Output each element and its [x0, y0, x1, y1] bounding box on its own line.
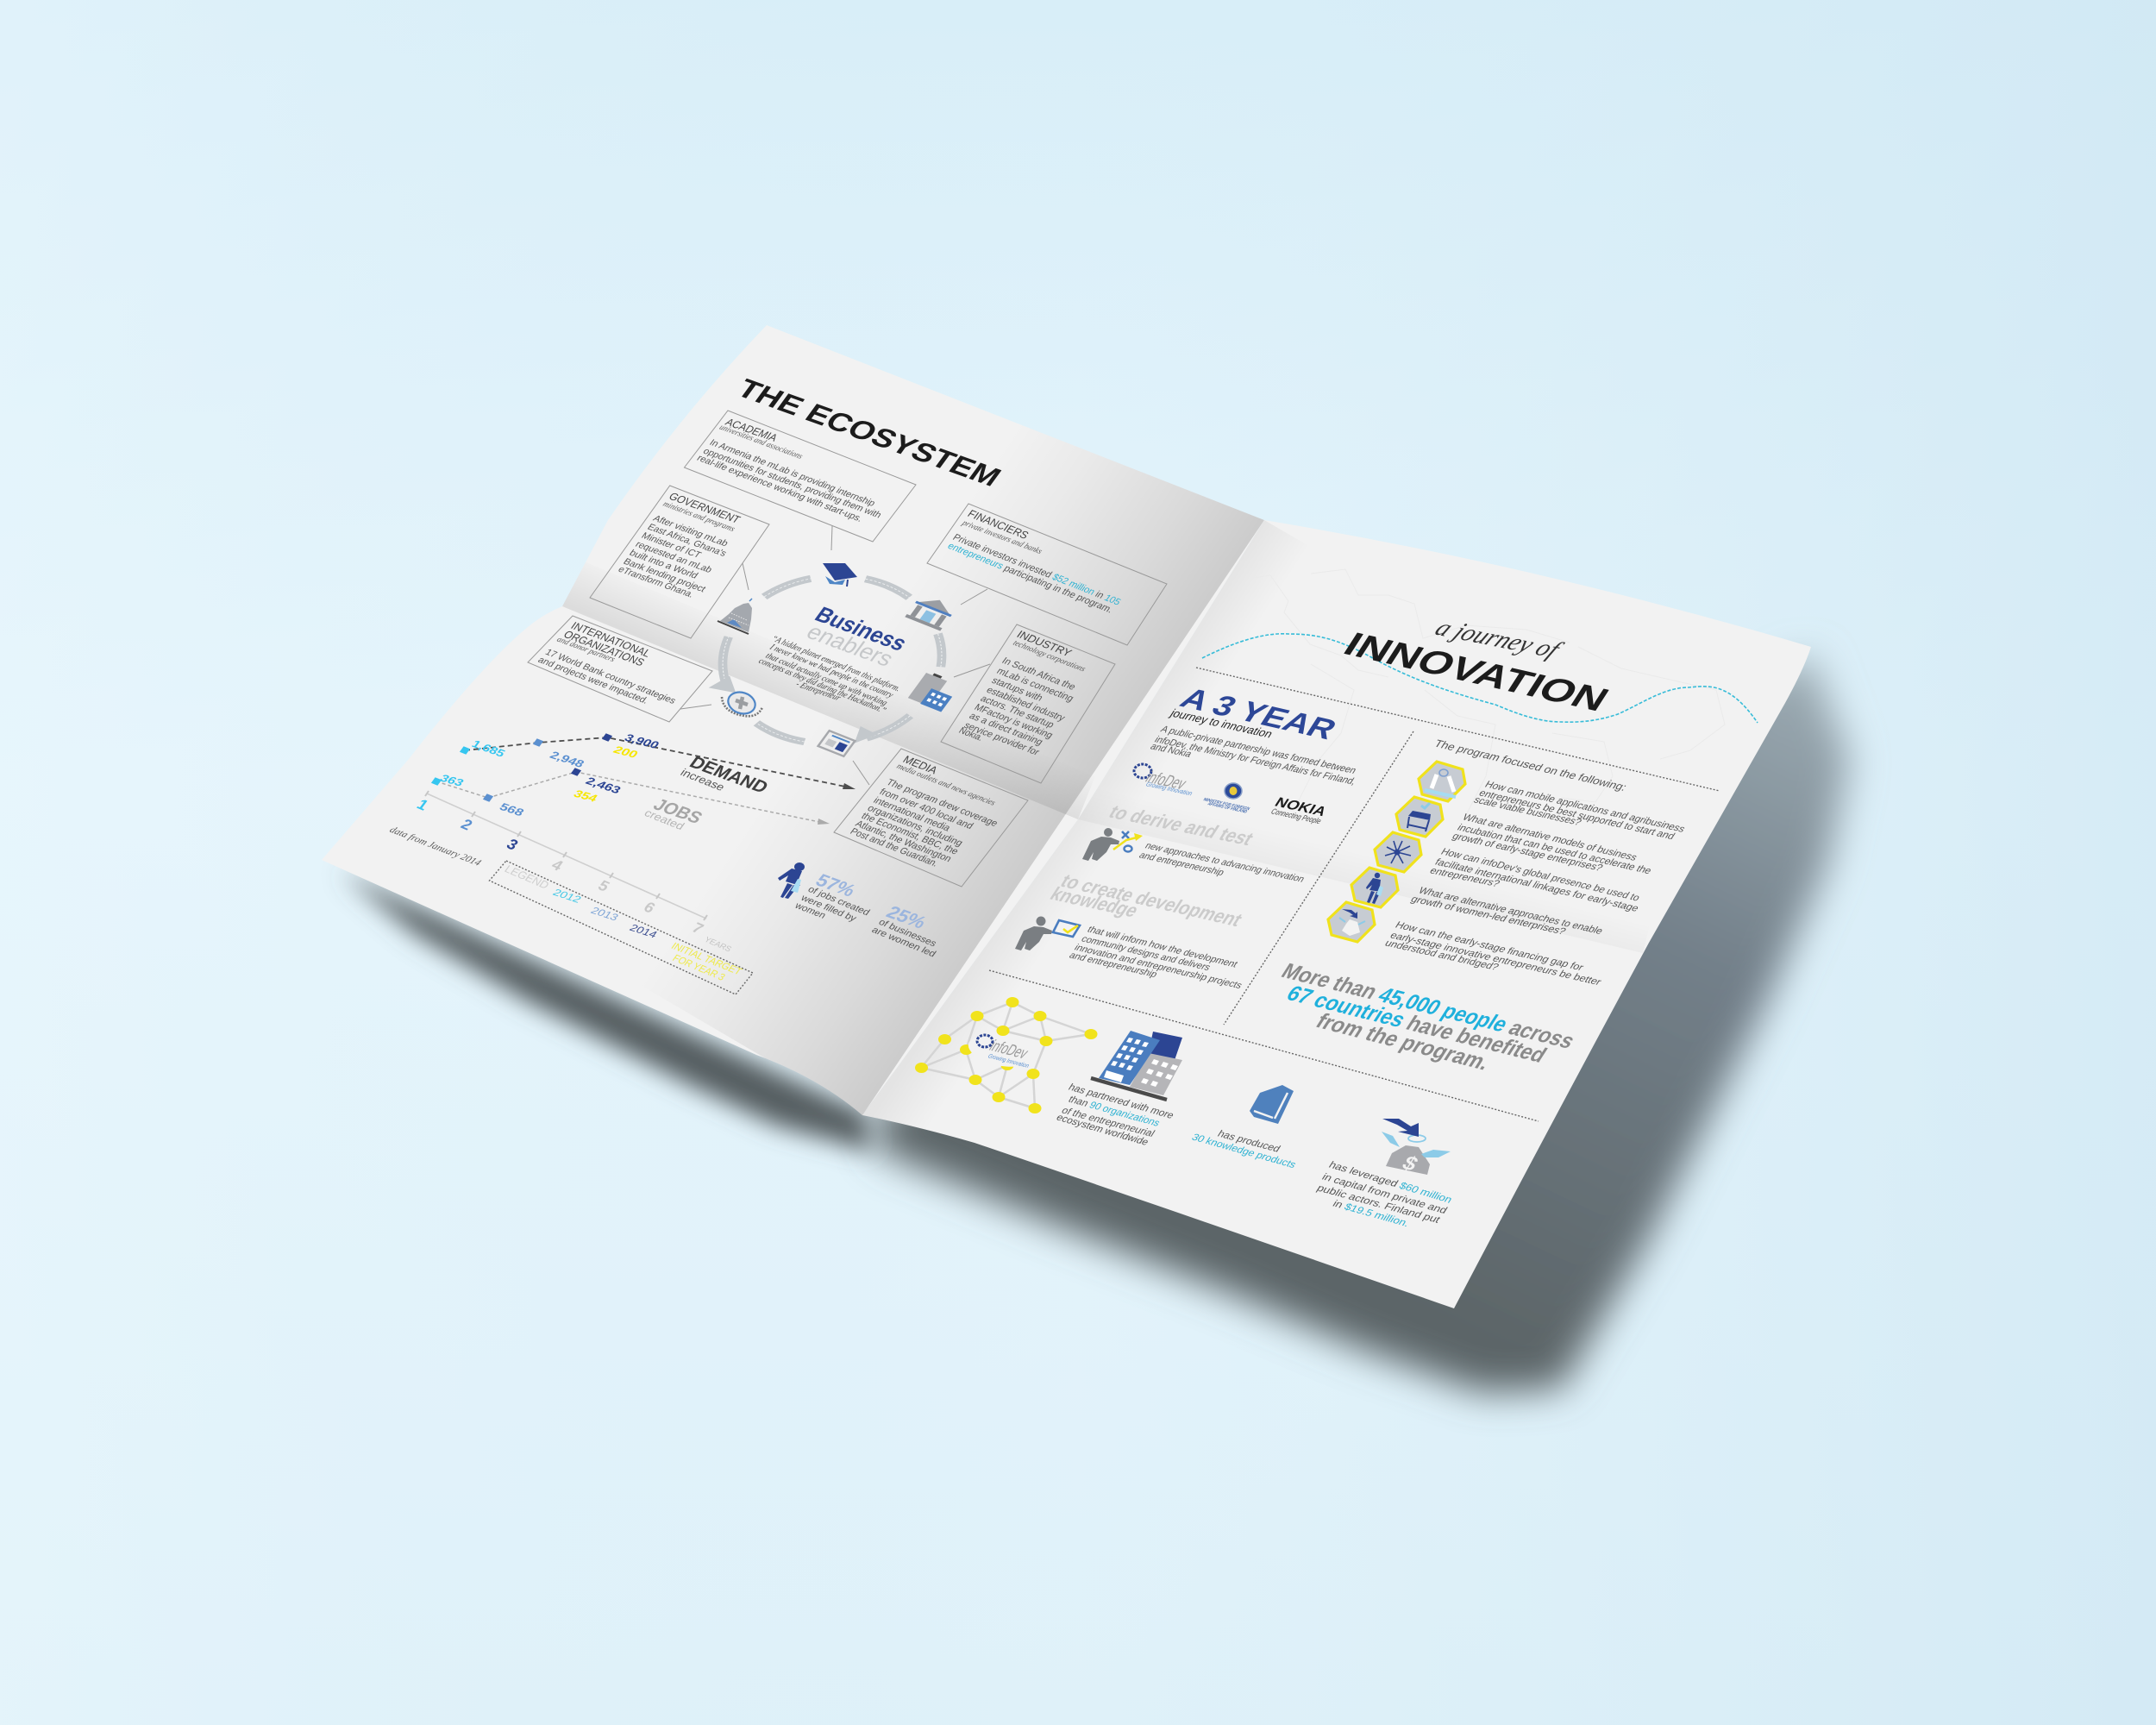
text block: jobs filled by women: women — [792, 900, 828, 920]
panel: left page, the ecosystem — [310, 302, 1276, 1130]
text block: international organizations: 17 World Bank country strategies — [543, 648, 678, 706]
text block: government: After visiting mLab — [651, 514, 730, 549]
dividers — [989, 668, 1720, 1121]
quote: that could actually come up with working — [763, 652, 889, 708]
data labels: 1,685 — [469, 737, 508, 759]
panel: to create development knowledge — [1015, 870, 1246, 991]
text block: partnership: A public-private partnership was formed between — [1158, 724, 1359, 776]
heading: a 3 year: A 3 YEAR — [1175, 681, 1343, 745]
figure: 57 percent: 57% — [812, 870, 860, 900]
text block: academia: In Armenia the mLab is providing internship — [707, 438, 877, 508]
text block: media: The program drew coverage — [884, 778, 1000, 829]
quote: concepts as they did during the Hackathon.” — [756, 657, 887, 715]
text block: international organizations: and projects were impacted. — [536, 656, 650, 706]
text block: media — [848, 778, 1000, 869]
text block: media: international media — [871, 796, 953, 833]
text block: jobs filled by women: of jobs created — [805, 885, 872, 918]
text block: partnered: has partnered with more — [1066, 1082, 1177, 1121]
text block: question 1: How can mobile applications and agribusiness — [1482, 779, 1688, 834]
text block: academia: real-life experience working with start-ups. — [695, 454, 865, 524]
label: jobs created: created — [642, 806, 687, 832]
text block: industry: actors. The startup — [978, 694, 1056, 730]
icon: money bag with wings: $ — [1398, 1152, 1422, 1176]
text block: financiers: Private investors invested $52 million in 105 — [950, 533, 1122, 607]
subheading: media: media outlets and news agencies — [894, 762, 998, 807]
icon: hexagon network — [1375, 832, 1421, 872]
legend: 2013 — [588, 905, 621, 923]
logo: ministry for foreign affairs of finland — [1202, 783, 1250, 814]
data labels: 2,463 — [583, 775, 624, 796]
text block: industry: Nokia. — [956, 726, 985, 743]
stat: capital leveraged — [1314, 1119, 1455, 1229]
icon: un emblem — [722, 689, 762, 717]
heading: business enablers: Business — [810, 603, 912, 656]
panel: government — [590, 486, 769, 638]
text block: partnered: than 90 organizations — [1066, 1094, 1163, 1128]
text block: partnered: ecosystem worldwide — [1054, 1112, 1151, 1148]
text block: women-led businesses: of businesses — [876, 918, 939, 949]
icon: man with strategy — [1082, 828, 1143, 861]
axis: years: 7 — [689, 919, 707, 937]
diagram: infodev partner network — [915, 997, 1097, 1113]
text block: question 3: entrepreneurs? — [1427, 865, 1502, 889]
data labels: 354 — [571, 787, 601, 804]
text block: new approaches: new approaches to advancing innovation — [1143, 841, 1307, 884]
text block: question 3: facilitate international linkages for early-stage — [1432, 856, 1642, 914]
paper: left page — [310, 302, 1276, 1130]
text block: inform development: innovation and entrepreneurship projects — [1072, 943, 1244, 991]
heading: program focus: The program focused on the following: — [1432, 737, 1629, 794]
icon: office building — [907, 671, 962, 712]
text block: industry: established industry — [984, 686, 1067, 724]
ring arcs — [685, 548, 978, 771]
heading: to create development knowledge: to create development — [1056, 870, 1246, 931]
text block: financiers: entrepreneurs participating in the program. — [945, 542, 1115, 615]
title: a journey of innovation: a journey of — [1430, 613, 1569, 663]
panel: program focus questions — [1328, 737, 1688, 988]
stat: knowledge products — [1189, 1085, 1299, 1170]
subheading: journey to innovation: journey to innovation — [1167, 706, 1275, 740]
text block: knowledge products: has produced — [1215, 1128, 1282, 1154]
text block: question 2: incubation that can be used to accelerate the — [1455, 822, 1654, 876]
text block: government: requested an mLab — [633, 540, 714, 575]
text block: media: Post and the Guardian. — [848, 827, 940, 869]
logo: infodev: Growing Innovation — [1144, 781, 1194, 797]
text block: industry: service provider for — [962, 721, 1041, 757]
callout: people across countries: from the program. — [1312, 1009, 1495, 1075]
text block: industry: mLab is connecting — [994, 667, 1075, 704]
logo: infodev in network: Growing Innovation — [987, 1052, 1031, 1070]
logo: nokia — [1269, 794, 1330, 826]
stat: partnered organizations — [1054, 1031, 1182, 1148]
legend: 2014 — [627, 922, 660, 940]
text block: media: organizations, including — [865, 804, 964, 849]
panel: a 3 year journey — [1134, 681, 1359, 826]
text block: question 5: early-stage innovative entrepreneurs be better — [1388, 930, 1604, 988]
panel: international organizations — [528, 616, 712, 722]
subheading: academia: universities and associations — [718, 423, 805, 461]
text block: inform development: that will inform how the development — [1085, 925, 1240, 969]
connector lines — [680, 526, 990, 785]
logo: infodev: infoDev — [1142, 768, 1190, 794]
logo: infodev — [1134, 764, 1194, 797]
subheading: financiers: private investors and banks — [959, 518, 1044, 556]
text block: partnered: of the entrepreneurial — [1059, 1105, 1157, 1139]
logo: nokia: NOKIA — [1272, 794, 1330, 819]
text block: government: Bank lending project — [621, 557, 707, 594]
paper: right page — [854, 509, 1820, 1320]
subheading: industry: technology corporations — [1011, 639, 1087, 674]
quote: - Entrepreneur — [793, 681, 843, 703]
icon: woman — [778, 862, 805, 899]
heading: financiers: FINANCIERS — [965, 507, 1031, 542]
data labels: 568 — [497, 800, 527, 819]
text block: inform development: and entrepreneurship — [1067, 950, 1159, 980]
text block: question 5: How can the early-stage financing gap for — [1393, 919, 1586, 973]
axis: years — [414, 791, 733, 954]
text block: inform development: community designs and delivers — [1079, 934, 1213, 973]
label: demand increase: DEMAND — [686, 753, 772, 797]
text block: government: East Africa, Ghana's — [645, 523, 729, 559]
logo: nokia: Connecting People — [1269, 807, 1323, 826]
icon: bank — [905, 593, 957, 630]
text block: industry — [956, 656, 1077, 757]
text block: question 2: What are alternative models of business — [1460, 812, 1639, 863]
callout: people across countries: 67 countries have benefited — [1282, 982, 1551, 1067]
icon: hexagon money bag — [1328, 902, 1375, 942]
icon: newspaper — [818, 731, 855, 756]
text block: jobs filled by women: were filled by — [798, 893, 859, 924]
subheading: international organizations: and donor partners — [555, 636, 617, 664]
data labels: 2,948 — [548, 749, 587, 770]
label: demand increase: increase — [678, 766, 727, 794]
panel: media — [834, 749, 1028, 887]
text block: government — [616, 514, 730, 599]
axis: years: 3 — [504, 836, 522, 853]
heading: media: MEDIA — [900, 753, 941, 776]
text block: partnered — [1054, 1082, 1177, 1148]
text block: inform development — [1067, 925, 1244, 991]
panel: industry — [941, 624, 1115, 783]
panel: financiers — [927, 504, 1167, 645]
note: data date: data from January 2014 — [387, 825, 483, 868]
heading: government: GOVERNMENT — [667, 490, 743, 525]
text block: industry: as a direct training — [967, 712, 1044, 747]
label: jobs created: JOBS — [649, 795, 706, 827]
diagram: business enablers ring — [685, 548, 978, 771]
text block: media: from over 400 local and — [877, 787, 975, 831]
text block: question 2: growth of early-stage enterprises? — [1450, 831, 1606, 873]
text block: industry: In South Africa the — [1000, 656, 1077, 692]
title: a journey of innovation: INNOVATION — [1337, 625, 1616, 718]
panel: to derive and test — [1082, 801, 1307, 884]
line: jobs created — [431, 768, 830, 825]
figure: 25 percent: 25% — [882, 902, 931, 932]
logo: infodev in network: infoDev — [986, 1038, 1031, 1063]
text block: industry: MFactory is working — [972, 703, 1055, 741]
heading: to create development knowledge: knowledge — [1046, 883, 1143, 921]
text block: government: eTransform Ghana. — [616, 565, 696, 599]
axis: years: 4 — [548, 856, 567, 874]
data labels: 363 — [437, 772, 467, 788]
text block: capital: in capital from private and — [1319, 1171, 1450, 1216]
text block: question 4: growth of women-led enterprises? — [1408, 894, 1569, 937]
text block: capital: public actors. Finland put — [1314, 1182, 1444, 1226]
data labels: 200 — [611, 743, 641, 760]
data labels — [437, 731, 662, 819]
text block: knowledge products: 30 knowledge products — [1189, 1132, 1299, 1170]
icon: hexagon market stall — [1396, 797, 1443, 837]
data labels: 3,900 — [622, 731, 662, 751]
logo: infodev in network — [977, 1035, 1031, 1070]
text block: partnership: infoDev, the Ministry for Foreign Affairs for Finland, — [1152, 734, 1358, 787]
heading: industry: INDUSTRY — [1014, 628, 1075, 659]
text block: partnership: and Nokia — [1148, 741, 1194, 759]
text block: capital — [1314, 1159, 1455, 1229]
decoration: dashed journey wave — [1202, 634, 1758, 723]
map: faint world outline — [1253, 569, 1725, 815]
text block: media: the Economist, BBC, the — [859, 812, 960, 856]
panel: right page, a journey of innovation — [854, 509, 1820, 1320]
line: demand increase — [460, 733, 856, 789]
axis: years: 2 — [458, 816, 476, 833]
text block: women-led businesses: are women led — [869, 925, 937, 959]
axis: years: 5 — [595, 877, 613, 894]
stat: women jobs — [778, 862, 939, 959]
legend: INITIAL TARGET — [669, 940, 745, 977]
text block: media: Atlantic, the Washington — [853, 819, 953, 864]
subheading: government: ministries and programs — [661, 500, 736, 534]
legend: 2012 — [550, 887, 584, 905]
axis: years: 6 — [641, 899, 659, 916]
logo: ministry for foreign affairs of finland: MINISTRY FOR FOREIGN — [1202, 798, 1250, 812]
text block: question 1: entrepreneurs be best supported to start and — [1476, 787, 1677, 842]
text block: jobs filled by women — [792, 885, 872, 924]
icon: capitol — [718, 599, 752, 634]
icon: man with checklist — [1015, 916, 1080, 950]
drop shadow under booklet — [341, 656, 1850, 1393]
text block: new approaches: and entrepreneurship — [1137, 850, 1226, 878]
heading: academia: ACADEMIA — [723, 416, 780, 443]
axis: years: YEARS — [702, 936, 733, 954]
text block: industry: startups with — [989, 676, 1044, 703]
text block: government: built into a World — [627, 549, 699, 580]
text block: question 1: scale viable businesses? — [1471, 794, 1584, 828]
title: the ecosystem: THE ECOSYSTEM — [731, 373, 1007, 492]
callout: people across countries: More than 45,000 people across — [1277, 959, 1580, 1053]
text block: question 4: What are alternative approaches to enable — [1416, 885, 1606, 937]
heading: business enablers: enablers — [801, 620, 899, 671]
icon: office towers — [1091, 1031, 1182, 1100]
heading: to derive and test: to derive and test — [1105, 801, 1257, 850]
axis: years: 1 — [414, 796, 432, 813]
text block: question 5: understood and bridged? — [1382, 938, 1501, 973]
quote: “A hidden planet emerged from this platform. — [769, 635, 902, 693]
panel: academia — [685, 411, 916, 542]
icon: graduation cap — [823, 563, 857, 586]
text block: capital: has leveraged $60 million — [1326, 1159, 1455, 1205]
icon: hexagon woman — [1351, 868, 1398, 907]
text block: capital: in $19.5 million. — [1331, 1198, 1412, 1229]
icon: book — [1250, 1085, 1294, 1124]
text block: academia: opportunities for students, providing them with — [701, 447, 883, 520]
legend: LEGEND — [502, 862, 552, 891]
heading: international organizations: ORGANIZATIONS — [561, 628, 648, 668]
icon: money bag with wings — [1382, 1119, 1451, 1176]
quote: I never knew we had people in the country — [767, 643, 895, 700]
legend — [490, 861, 753, 994]
text block: government: Minister of ICT — [639, 531, 703, 561]
icon: hexagon handshake — [1419, 762, 1465, 801]
chart: demand and jobs over years — [387, 731, 856, 994]
logo: ministry for foreign affairs of finland: AFFAIRS OF FINLAND — [1206, 802, 1248, 814]
text block: question 3: How can infoDev's global presence be used to — [1438, 846, 1643, 903]
title: a journey of innovation — [1337, 613, 1616, 718]
legend: FOR YEAR 3 — [670, 952, 728, 982]
heading: international organizations: INTERNATIONAL — [568, 619, 654, 660]
